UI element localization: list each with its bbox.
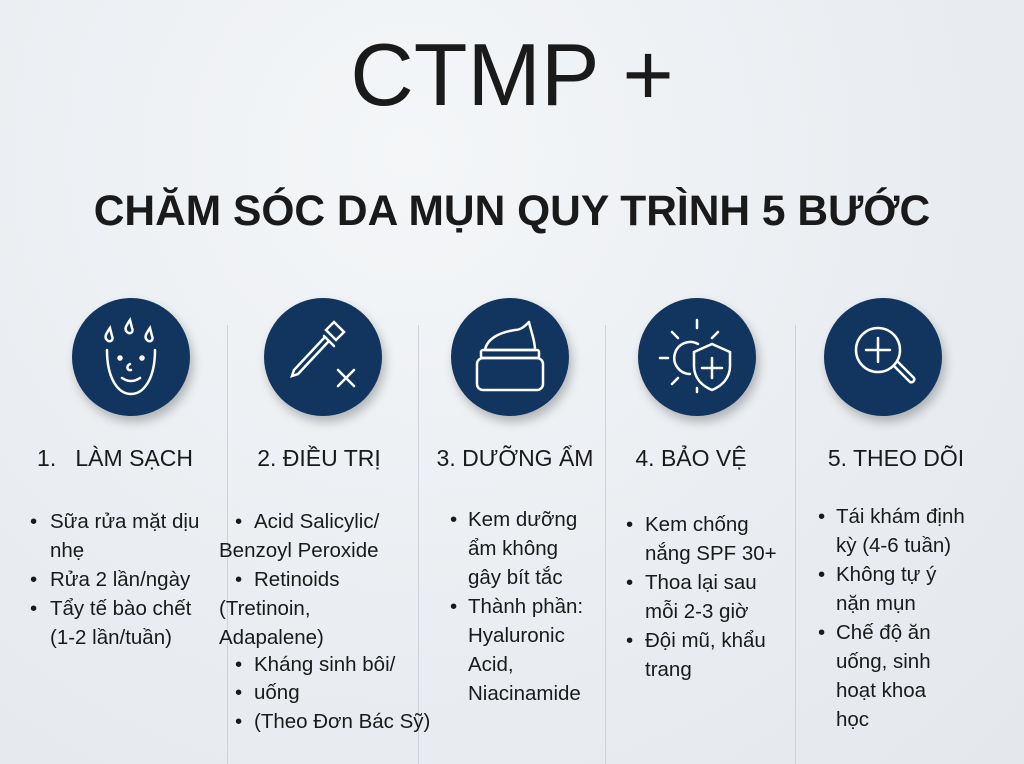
column 2: Benzoyl Peroxide [219,539,379,562]
column 3: • [450,508,457,531]
column 2: Acid Salicylic/ [254,510,379,533]
column 4: • [626,571,633,594]
column 2: (Tretinoin, [219,597,311,620]
column 3: Kem dưỡng [468,508,577,531]
heading 3: 3. DƯỠNG ẨM [437,445,593,471]
icon: face with drops [72,298,190,416]
column 4: • [626,513,633,536]
column 5: kỳ (4-6 tuần) [836,534,951,557]
column 2: • [235,710,242,733]
column 4: mỗi 2-3 giờ [645,600,748,623]
icon: sun shield [638,298,756,416]
column 5: uống, sinh [836,650,931,673]
column 2: Kháng sinh bôi/ [254,653,395,676]
heading 5: 5. THEO DÕI [828,445,964,471]
column 4: Đội mũ, khẩu [645,629,766,652]
column 1: Rửa 2 lần/ngày [50,568,190,591]
column 5: • [818,505,825,528]
column 5: • [818,563,825,586]
column 2: (Theo Đơn Bác Sỹ) [254,710,430,733]
column 3: Niacinamide [468,682,581,705]
column 5: hoạt khoa [836,679,926,702]
column 2: • [235,681,242,704]
column 2: • [235,510,242,533]
column 5: nặn mụn [836,592,916,615]
title: CTMP + [350,25,674,124]
column 1: • [30,510,37,533]
heading 1: 1. LÀM SẠCH [37,445,193,471]
column 4: • [626,629,633,652]
heading 2: 2. ĐIỀU TRỊ [257,445,381,471]
column 5: Chế độ ăn [836,621,931,644]
column 1: (1-2 lần/tuần) [50,626,172,649]
column 5: Không tự ý [836,563,936,586]
column 4: nắng SPF 30+ [645,542,777,565]
column 2: Retinoids [254,568,339,591]
column 1: Sữa rửa mặt dịu [50,510,199,533]
column 1: • [30,568,37,591]
column 3: • [450,595,457,618]
heading 4: 4. BẢO VỆ [635,445,747,471]
column 2: • [235,653,242,676]
column 5: học [836,708,869,731]
icon: dropper [264,298,382,416]
column 4: Kem chống [645,513,749,536]
column 3: Hyaluronic [468,624,565,647]
column 2: uống [254,681,300,704]
subtitle: CHĂM SÓC DA MỤN QUY TRÌNH 5 BƯỚC [94,188,930,235]
column 5: • [818,621,825,644]
icon: cream jar [451,298,569,416]
column 3: Thành phần: [468,595,583,618]
column 5: Tái khám định [836,505,965,528]
column 4: Thoa lại sau [645,571,757,594]
column 4: trang [645,658,692,681]
column 3: ẩm không [468,537,558,560]
column 2: Adapalene) [219,626,324,649]
column 3: Acid, [468,653,514,676]
column 2: • [235,568,242,591]
column 1: Tẩy tế bào chết [50,597,191,620]
icon: magnifier [824,298,942,416]
column 1: • [30,597,37,620]
column 3: gây bít tắc [468,566,563,589]
column 1: nhẹ [50,539,84,562]
